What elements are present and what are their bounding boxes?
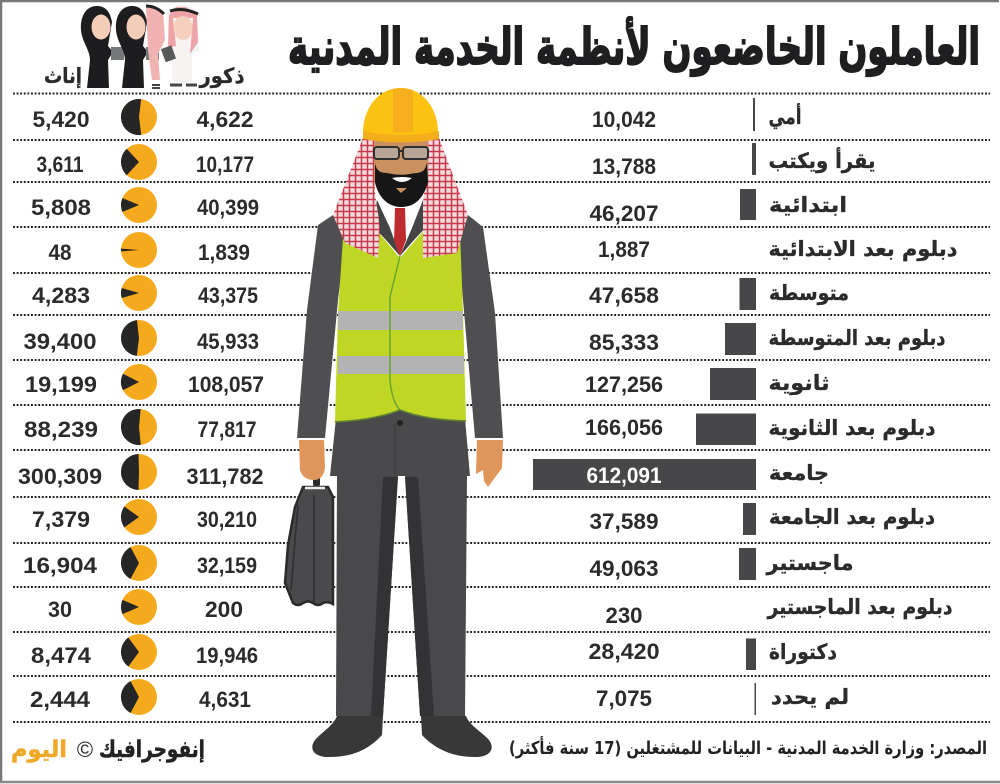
bar: masters bbox=[739, 548, 756, 580]
pie: illiterate bbox=[121, 99, 157, 135]
row: post-intermediate diploma bbox=[24, 320, 946, 356]
row: reads and writes: 10,177 bbox=[196, 152, 254, 177]
pie: post-primary diploma bbox=[121, 232, 157, 268]
pie: intermediate bbox=[121, 275, 157, 311]
bar: primary bbox=[740, 189, 756, 220]
row: reads and writes: 13,788 bbox=[592, 154, 656, 179]
row: doctorate: 8,474 bbox=[31, 643, 92, 668]
pie: post-secondary diploma bbox=[121, 409, 157, 445]
pie: university bbox=[121, 454, 157, 490]
row: post-primary diploma: 1,887 bbox=[598, 237, 650, 262]
bar: post-intermediate diploma bbox=[725, 323, 756, 355]
row: university: 311,782 bbox=[186, 464, 264, 489]
row: primary: 46,207 bbox=[590, 201, 658, 226]
row: illiterate: 5,420 bbox=[32, 107, 90, 132]
face bbox=[374, 138, 428, 205]
pie: reads and writes bbox=[121, 144, 157, 180]
row: doctorate: 19,946 bbox=[196, 643, 258, 668]
row: secondary: 108,057 bbox=[188, 372, 264, 397]
row: doctorate: 28,420 bbox=[588, 639, 660, 664]
bar: intermediate bbox=[740, 278, 756, 310]
bar: university bbox=[533, 459, 756, 490]
row: doctorate bbox=[31, 634, 837, 670]
row: university: جامعة bbox=[769, 461, 829, 485]
row: post-masters diploma: دبلوم بعد الماجستير bbox=[767, 595, 953, 619]
row: post-primary diploma: 1,839 bbox=[198, 240, 250, 265]
hands bbox=[299, 440, 503, 487]
logo: infographic Al-Youm bbox=[11, 737, 205, 763]
row: post-secondary diploma: 166,056 bbox=[585, 415, 663, 440]
sleeves bbox=[297, 215, 503, 438]
jacket bbox=[330, 405, 470, 476]
row: post-secondary diploma: دبلوم بعد الثانوية bbox=[768, 416, 936, 440]
row: post-intermediate diploma: 45,933 bbox=[197, 329, 259, 354]
icon: briefcase bbox=[285, 463, 333, 605]
bar: reads and writes bbox=[752, 143, 756, 175]
row: post-intermediate diploma: 39,400 bbox=[24, 329, 96, 354]
pie: undetermined bbox=[121, 679, 157, 715]
keffiyeh bbox=[333, 138, 468, 258]
row: intermediate: متوسطة bbox=[769, 281, 849, 305]
shoes bbox=[312, 716, 492, 757]
glasses bbox=[374, 147, 428, 159]
icon: man 1 bbox=[146, 6, 165, 88]
legs bbox=[336, 475, 467, 716]
row: post-university diploma: دبلوم بعد الجامعة bbox=[769, 505, 935, 529]
row: doctorate: دكتوراة bbox=[769, 640, 837, 664]
row: reads and writes bbox=[36, 143, 876, 180]
row: masters: ماجستير bbox=[766, 551, 854, 575]
row: masters: 49,063 bbox=[590, 556, 658, 581]
row: masters bbox=[23, 545, 854, 581]
pie: post-masters diploma bbox=[121, 589, 157, 625]
row: primary: 40,399 bbox=[197, 195, 259, 220]
legend: male: ذكور bbox=[199, 64, 245, 88]
row: post-primary diploma: 48 bbox=[48, 240, 72, 265]
row: undetermined bbox=[30, 679, 849, 715]
row: secondary: 127,256 bbox=[585, 372, 663, 397]
row: primary: 5,808 bbox=[31, 195, 91, 220]
row: reads and writes: 3,611 bbox=[36, 152, 84, 177]
row: post-university diploma: 30,210 bbox=[197, 507, 257, 532]
row: post-university diploma: 37,589 bbox=[590, 509, 658, 534]
row: post-masters diploma: 30 bbox=[48, 597, 72, 622]
row: university bbox=[18, 454, 829, 490]
bar: doctorate bbox=[746, 638, 756, 670]
row: post-primary diploma bbox=[48, 232, 958, 268]
pie: secondary bbox=[121, 364, 157, 400]
row: secondary bbox=[25, 364, 830, 400]
row: post-secondary diploma: 88,239 bbox=[24, 417, 98, 442]
row: secondary: 19,199 bbox=[25, 372, 97, 397]
logo: infographic Al-Youm: © bbox=[77, 737, 93, 762]
pie: primary bbox=[121, 187, 157, 223]
icon: two women and two men bbox=[81, 5, 199, 88]
row: masters: 32,159 bbox=[197, 553, 257, 578]
row: post-intermediate diploma: 85,333 bbox=[589, 330, 659, 355]
row: post-masters diploma: 230 bbox=[606, 603, 642, 628]
row: secondary: ثانوية bbox=[768, 371, 830, 395]
row: post-masters diploma bbox=[48, 589, 953, 628]
row: undetermined: لم يحدد bbox=[771, 685, 849, 709]
row: illiterate: أمي bbox=[768, 102, 802, 129]
row: primary: ابتدائية bbox=[769, 193, 847, 217]
row: intermediate bbox=[32, 275, 849, 311]
logo: infographic Al-Youm: إنفوجرافيك bbox=[99, 737, 205, 763]
row: illiterate: 10,042 bbox=[592, 107, 656, 132]
row: intermediate: 4,283 bbox=[32, 283, 90, 308]
bar: post-university diploma bbox=[743, 503, 756, 535]
row: intermediate: 43,375 bbox=[198, 283, 258, 308]
row: post-secondary diploma bbox=[24, 409, 936, 445]
legend: female: إناث bbox=[44, 64, 82, 88]
row: illiterate: 4,622 bbox=[196, 107, 254, 132]
icon: woman 2 bbox=[116, 6, 159, 88]
figure: worker bbox=[285, 88, 503, 757]
icon: woman 1 bbox=[81, 6, 124, 88]
icon: man 2 bbox=[161, 5, 199, 85]
logo: infographic Al-Youm: اليوم bbox=[11, 737, 67, 763]
row: illiterate bbox=[32, 98, 802, 135]
row: masters: 16,904 bbox=[23, 553, 98, 578]
row: reads and writes: يقرأ ويكتب bbox=[768, 146, 876, 173]
pie: masters bbox=[121, 545, 157, 581]
row: post-university diploma bbox=[32, 499, 935, 535]
beard bbox=[375, 162, 428, 207]
row: post-intermediate diploma: دبلوم بعد المتوسطة bbox=[768, 326, 946, 350]
bar: undetermined bbox=[754, 683, 756, 715]
pie: doctorate bbox=[121, 634, 157, 670]
row: university: 612,091 bbox=[586, 463, 662, 488]
row: intermediate: 47,658 bbox=[589, 283, 659, 308]
row: university: 300,309 bbox=[18, 464, 102, 489]
bar: post-secondary diploma bbox=[696, 414, 756, 445]
pie: post-university diploma bbox=[121, 499, 157, 535]
row: post-masters diploma: 200 bbox=[205, 597, 243, 622]
pie: post-intermediate diploma bbox=[121, 320, 157, 356]
row: primary bbox=[31, 187, 847, 226]
row: post-primary diploma: دبلوم بعد الابتدائية bbox=[768, 237, 958, 261]
safety vest bbox=[335, 228, 466, 476]
hard hat bbox=[363, 88, 439, 142]
row: undetermined: 2,444 bbox=[30, 687, 91, 712]
bar: secondary bbox=[710, 368, 756, 400]
row: post-university diploma: 7,379 bbox=[32, 507, 90, 532]
shirt and tie bbox=[372, 198, 428, 258]
bar: illiterate bbox=[753, 98, 755, 131]
row: undetermined: 7,075 bbox=[596, 686, 652, 711]
row: undetermined: 4,631 bbox=[199, 687, 251, 712]
row: post-secondary diploma: 77,817 bbox=[198, 417, 256, 442]
